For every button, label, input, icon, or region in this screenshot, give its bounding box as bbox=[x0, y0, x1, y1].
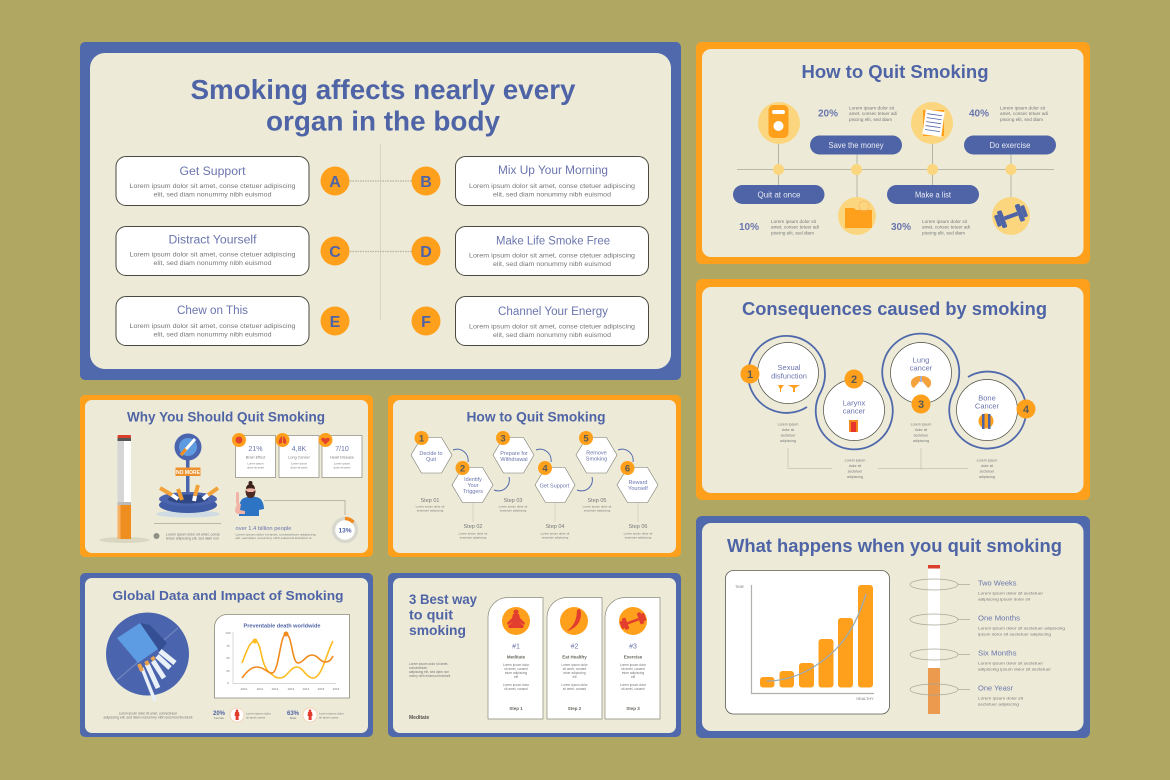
item 2: larynx cancer: Larynx bbox=[843, 398, 866, 408]
item 3: lung cancer: Lung bbox=[913, 356, 929, 364]
card: Get Support: Lorem ipsum dolor sit amet, conse ctetuer adipiscing bbox=[130, 183, 296, 190]
card: step 2 eat healthy: Lorem ipsum dolor bbox=[561, 663, 589, 667]
icon: document bbox=[911, 102, 953, 144]
item 4: bone cancer: Cancer bbox=[975, 402, 1000, 410]
stat: 40%: Lorem ipsum dolor sit bbox=[1000, 106, 1046, 110]
chart: 13% donut: 13% bbox=[338, 528, 352, 534]
title: How to Quit Smoking bbox=[802, 62, 988, 82]
title: to quit bbox=[409, 606, 453, 622]
card: step 2 eat healthy: Step 2 bbox=[568, 706, 582, 711]
stat: lung cancer: Lung Cancer bbox=[288, 456, 311, 460]
step 5 bbox=[576, 431, 617, 512]
badge: B bbox=[412, 166, 440, 196]
step 2: Identify bbox=[464, 477, 482, 483]
step 2 bbox=[452, 461, 493, 540]
item 3: lung cancer: adipiscing bbox=[913, 439, 929, 443]
milestone: two weeks: Lorem ipsum dolor sit sectetuer bbox=[978, 592, 1044, 596]
stat: 20%: Lorem ipsum dolor sit bbox=[849, 106, 895, 110]
pill: Save the money bbox=[810, 136, 902, 154]
stat: heart disease: 7/10 bbox=[335, 446, 349, 453]
milestone: one year bbox=[910, 684, 1024, 706]
panel: what happens when you quit bbox=[696, 516, 1090, 738]
card: Chew on This: Lorem ipsum dolor sit amet, conse ctetuer adipiscing bbox=[130, 323, 296, 330]
item 4: bone cancer: 4 bbox=[1023, 404, 1030, 416]
text: 1.4 billion people: elit, sed diam nonummy nibh euismod tincidunt ut bbox=[236, 536, 312, 540]
card: Distract Yourself bbox=[116, 226, 309, 276]
illustration: man smoking bbox=[235, 481, 264, 516]
badge: A bbox=[320, 166, 350, 196]
stat: lung cancer bbox=[276, 433, 319, 478]
pill: Save the money: Save the money bbox=[828, 141, 884, 150]
card: Make Life Smoke Free: Make Life Smoke Free bbox=[496, 236, 610, 248]
stat: 10%: 10% bbox=[739, 222, 759, 233]
milestone: six months: adipiscing ipsum dolor sit sectetuer bbox=[978, 668, 1052, 672]
panel: 3 best ways bbox=[388, 573, 681, 737]
title: How to Quit Smoking bbox=[466, 410, 606, 424]
card: Channel Your Energy: Channel Your Energy bbox=[498, 306, 608, 318]
stat: 20% female: 20% bbox=[213, 711, 226, 717]
card: Distract Yourself: Distract Yourself bbox=[168, 234, 257, 246]
step 6: Step 06 bbox=[629, 524, 647, 530]
pill: Do exercise bbox=[964, 136, 1056, 154]
stat: 30%: 30% bbox=[891, 222, 911, 233]
pill: Do exercise: Do exercise bbox=[990, 141, 1031, 150]
text: 1.4 billion people bbox=[236, 526, 316, 540]
stat: 20% bbox=[818, 106, 897, 122]
milestone: one year: One Yeasr bbox=[978, 684, 1013, 692]
item 2: larynx cancer: dolor sit bbox=[849, 464, 861, 468]
item 3: lung cancer: sectetuer bbox=[914, 434, 929, 438]
pill: Quit at once bbox=[733, 185, 824, 204]
step 5: Smoking bbox=[586, 456, 607, 462]
card: Mix Up Your Morning: elit, sed diam nonummy nibh euismod bbox=[493, 192, 611, 198]
milestone: six months: Six Months bbox=[978, 648, 1017, 658]
pill: Make a list: Make a list bbox=[915, 190, 952, 200]
stat: 63% male: Male bbox=[290, 716, 297, 720]
chart: preventable death line chart: 2012 bbox=[272, 687, 279, 691]
card: step 3 exercise bbox=[605, 598, 660, 719]
text: 1.4 billion people: Lorem ipsum dolor sit amet, consectetuer adipiscing bbox=[236, 532, 316, 536]
card: step 1 meditate: Lorem ipsum dolor bbox=[503, 683, 530, 687]
panel: how to quit steps bbox=[388, 395, 681, 557]
title: organ in the body bbox=[266, 106, 500, 136]
stat: brain effect: 21% bbox=[248, 446, 263, 453]
card: Distract Yourself: Lorem ipsum dolor sit amet, conse ctetuer adipiscing bbox=[130, 252, 296, 258]
item 1: sexual disfunction: 1 bbox=[747, 369, 753, 381]
step 6: Yourself bbox=[628, 486, 648, 492]
card: step 3 exercise: elit bbox=[631, 675, 635, 679]
stat: 10%: amet, consec tetuer adi bbox=[771, 224, 819, 230]
card: step 1 meditate: #1 bbox=[512, 644, 520, 650]
icon: folder wallet bbox=[838, 197, 876, 235]
chart: preventable death line chart bbox=[214, 614, 350, 698]
stat: lung cancer: 4,8K bbox=[292, 446, 307, 453]
panel: smoking affects every organ bbox=[80, 42, 681, 380]
card: step 3 exercise: #3 bbox=[629, 644, 637, 650]
stat: 63% male: 63% bbox=[287, 711, 300, 717]
illustration: cigarette timeline bbox=[928, 565, 940, 714]
milestone: one months: One Months bbox=[978, 614, 1020, 622]
item 4: bone cancer: Bone bbox=[978, 394, 996, 402]
step 2: 2 bbox=[460, 464, 465, 474]
item 3: lung cancer: Lorem ipsum bbox=[911, 422, 931, 426]
card: step 2 eat healthy: sit amet, conaed bbox=[563, 667, 586, 671]
card: step 3 exercise: Lorem ipsum dolor bbox=[620, 663, 647, 667]
stat: heart disease: Lorem ipsum bbox=[334, 462, 351, 466]
title: What happens when you quit smoking bbox=[727, 535, 1062, 556]
chart: preventable death line chart: 100 bbox=[225, 631, 231, 635]
panel: why you should quit bbox=[80, 395, 373, 557]
item 3: lung cancer: 3 bbox=[918, 399, 924, 411]
item 1: sexual disfunction: disfunction bbox=[771, 372, 807, 380]
card: Chew on This: elit, sed diam nonummy nibh euismod bbox=[154, 332, 272, 338]
badge: F: F bbox=[421, 314, 431, 331]
stat: heart disease: dolor sit amet bbox=[334, 466, 351, 470]
step 6: Lorem ipsum dolor sit bbox=[624, 532, 652, 536]
step 3: 3 bbox=[500, 434, 506, 444]
step 2: Lorem ipsum dolor sit bbox=[459, 532, 488, 536]
stat: lung cancer: dolor sit amet bbox=[291, 466, 308, 470]
icon: no more sign and ashtray bbox=[156, 434, 220, 518]
badge: F bbox=[412, 306, 440, 336]
card: step 2 eat healthy: Eat Healthy bbox=[562, 654, 587, 660]
stat: 10% bbox=[739, 219, 819, 236]
stat: 30%: amet, consec tetuer adi bbox=[922, 224, 970, 230]
step 1: 1 bbox=[419, 434, 425, 444]
title: smoking bbox=[409, 622, 466, 638]
card: step 3 exercise: sit amet, conaed bbox=[621, 687, 645, 691]
title: Why You Should Quit Smoking bbox=[127, 410, 325, 424]
item 2: larynx cancer: Lorem ipsum bbox=[845, 458, 865, 462]
text: intro: Lorem ipsum dolor sit amet, bbox=[409, 662, 448, 666]
pill: Quit at once: Quit at once bbox=[758, 190, 801, 200]
item 1: sexual disfunction: Lorem ipsum bbox=[778, 422, 798, 426]
item 4: bone cancer: Lorem ipsum bbox=[977, 458, 997, 462]
chart: preventable death line chart: 2011 bbox=[257, 687, 264, 691]
step 4 bbox=[535, 461, 575, 540]
step 3: Step 03 bbox=[504, 498, 522, 504]
card: step 1 meditate: sit amet, conaed bbox=[504, 687, 528, 691]
step 1 bbox=[411, 431, 452, 512]
card: Make Life Smoke Free: elit, sed diam nonummy nibh euismod bbox=[493, 261, 611, 268]
badge: D bbox=[412, 236, 440, 266]
item 2: larynx cancer: 2 bbox=[851, 374, 857, 386]
text: description: adipiscing elit, sed diam nonummy nibh euismod tincidunt bbox=[104, 716, 193, 720]
chart: preventable death line chart: 2014 bbox=[303, 687, 310, 691]
item 1: sexual disfunction: dolor sit bbox=[782, 428, 794, 432]
item 1: sexual disfunction bbox=[740, 342, 818, 443]
stat: brain effect: Brain Effect bbox=[246, 456, 266, 460]
card: step 2 eat healthy: elit bbox=[572, 675, 577, 679]
step 3: Withdrawal bbox=[500, 457, 528, 463]
stat: 30%: piscing elit, sed diam bbox=[922, 230, 965, 236]
card: Make Life Smoke Free bbox=[456, 226, 648, 276]
chart: preventable death line chart: 75 bbox=[226, 644, 230, 648]
step 4: sectetuer adipiscing bbox=[542, 536, 569, 540]
stat: 63% male: sit amet conse bbox=[319, 716, 339, 720]
chart: preventable death line chart: 0 bbox=[227, 681, 229, 685]
text: 1.4 billion people: over 1.4 billion people bbox=[236, 526, 292, 532]
text: intro: adipiscing elit, sed diam non bbox=[409, 670, 449, 674]
item 4: bone cancer: sectetuer bbox=[980, 470, 995, 474]
icon: piggy jar bbox=[758, 102, 800, 144]
step 6: 6 bbox=[625, 464, 630, 474]
item 4: bone cancer bbox=[956, 380, 1036, 479]
badge: B: B bbox=[420, 174, 432, 191]
title: Consequences caused by smoking bbox=[742, 298, 1047, 319]
step 4: Lorem ipsum dolor sit bbox=[541, 532, 570, 536]
item 1: sexual disfunction: adipiscing bbox=[780, 439, 796, 443]
stat: 40% bbox=[969, 106, 1048, 122]
card: Chew on This bbox=[116, 296, 309, 346]
card: Get Support: Get Support bbox=[180, 166, 246, 178]
text: intro: consectetuer bbox=[409, 666, 428, 670]
step 5: sectetuer adipiscing bbox=[584, 508, 611, 512]
milestone: one months bbox=[910, 614, 1065, 636]
stat: heart disease: Heart Disease bbox=[330, 456, 354, 460]
stat: heart disease bbox=[318, 433, 362, 478]
step 1: Step 01 bbox=[421, 498, 439, 504]
card: Mix Up Your Morning: Lorem ipsum dolor sit amet, conse ctetuer adipiscing bbox=[469, 183, 635, 190]
card: step 1 meditate: Lorem ipsum dolor bbox=[503, 663, 530, 667]
stat: 20%: amet, consec tetuer adi bbox=[849, 111, 897, 116]
card: Distract Yourself: elit, sed diam nonummy nibh euismod bbox=[154, 260, 272, 267]
card: step 3 exercise: Exercise bbox=[624, 654, 643, 660]
badge: A: A bbox=[329, 174, 341, 191]
card: step 3 exercise: sit amet, conaed bbox=[621, 667, 645, 671]
label: meditate: Meditate bbox=[409, 715, 430, 721]
chart: health over time bars: HEALTHY bbox=[856, 697, 874, 701]
milestone: one months: Lorem ipsum dolor sit sectetuer adipiscing bbox=[978, 626, 1065, 630]
step 3: Lorem ipsum dolor sit bbox=[499, 504, 528, 508]
card: Channel Your Energy bbox=[456, 296, 648, 346]
step 5: 5 bbox=[583, 434, 589, 444]
milestone: one year: sectetuer adipiscing bbox=[978, 702, 1019, 706]
step 5: Remove bbox=[586, 450, 607, 456]
step 2: Triggers bbox=[463, 489, 483, 495]
card: step 3 exercise: Step 3 bbox=[626, 706, 640, 711]
icon: cigarette bbox=[100, 435, 150, 543]
card: step 1 meditate: Step 1 bbox=[509, 706, 523, 711]
step 5: Step 05 bbox=[588, 498, 606, 504]
badge: D: D bbox=[420, 244, 432, 261]
stat: 20% female: sit amet conse bbox=[246, 716, 266, 720]
card: step 2 eat healthy bbox=[547, 598, 602, 719]
badge: E bbox=[320, 306, 350, 336]
card: Make Life Smoke Free: Lorem ipsum dolor sit amet, conse ctetuer adipiscing bbox=[469, 252, 635, 260]
stat: 20% female bbox=[213, 708, 271, 722]
panel: global data bbox=[80, 573, 373, 737]
item 2: larynx cancer: adipiscing bbox=[847, 475, 863, 479]
stat: 30%: Lorem ipsum dolor sit bbox=[922, 219, 968, 224]
chart: preventable death line chart: 2015 bbox=[318, 687, 325, 691]
caption: ashtray text: Lorem ipsum dolor sit amet, conse bbox=[166, 532, 220, 536]
step 3: Prepare for bbox=[500, 451, 528, 457]
chart: preventable death line chart: 2013 bbox=[288, 687, 295, 691]
item 1: sexual disfunction: Sexual bbox=[778, 363, 801, 372]
badge: C: C bbox=[329, 244, 341, 261]
icon: dumbbell bbox=[992, 197, 1030, 235]
pill: Make a list bbox=[887, 185, 979, 204]
stat: 20%: piscing elit, sed diam bbox=[849, 117, 892, 122]
item 4: bone cancer: dolor sit bbox=[981, 464, 993, 468]
chart: 13% donut bbox=[334, 518, 356, 542]
stat: 40%: amet, consec tetuer adi bbox=[1000, 111, 1048, 116]
card: Get Support bbox=[116, 156, 309, 206]
item 3: lung cancer: dolor sit bbox=[915, 428, 927, 432]
text: intro: ummy nibh euismod tincidunt bbox=[409, 674, 450, 678]
step 1: sectetuer adipiscing bbox=[417, 508, 444, 512]
milestone: two weeks: Two Weeks bbox=[978, 578, 1017, 588]
milestone: one year: Lorem ipsum dolor sit bbox=[978, 696, 1024, 700]
item 2: larynx cancer: sectetuer bbox=[848, 470, 863, 474]
chart: health over time bars: TIME bbox=[735, 585, 744, 589]
text: description: Lorem ipsum dolor sit amet, consectetuer bbox=[119, 712, 178, 716]
badge: C bbox=[320, 236, 350, 266]
step 5: Lorem ipsum dolor sit bbox=[583, 504, 612, 508]
stat: 63% male: Lorem ipsum dolor bbox=[319, 712, 344, 716]
stat: brain effect: dolor sit amet bbox=[247, 466, 264, 470]
card: Channel Your Energy: Lorem ipsum dolor sit amet, conse ctetuer adipiscing bbox=[469, 324, 635, 330]
card: step 3 exercise: Lorem ipsum dolor bbox=[620, 683, 647, 687]
card: Mix Up Your Morning: Mix Up Your Morning bbox=[498, 165, 608, 177]
card: step 1 meditate: Meditate bbox=[507, 654, 526, 660]
card: Get Support: elit, sed diam nonummy nibh euismod bbox=[154, 192, 272, 198]
step 1: Lorem ipsum dolor sit bbox=[416, 504, 444, 508]
step 6: sectetuer adipiscing bbox=[625, 536, 652, 540]
panel: how to quit timeline bbox=[696, 42, 1090, 264]
step 4: 4 bbox=[542, 464, 548, 474]
chart: preventable death line chart: 2010 bbox=[241, 687, 248, 691]
card: Mix Up Your Morning bbox=[456, 156, 648, 206]
caption: ashtray text: tetuer adipiscing elit, sed diam non bbox=[166, 536, 219, 540]
step 3 bbox=[493, 431, 534, 512]
stat: lung cancer: Lorem ipsum bbox=[291, 462, 308, 466]
stat: 20% female: Lorem ipsum dolor bbox=[246, 712, 271, 716]
step 4: Step 04 bbox=[546, 524, 564, 530]
chart: preventable death line chart: 2016 bbox=[333, 687, 340, 691]
item 4: bone cancer: adipiscing bbox=[979, 475, 995, 479]
card: step 1 meditate: elit bbox=[514, 675, 518, 679]
card: step 3 exercise: etuer adipiscing bbox=[622, 671, 644, 675]
step 1: Quit bbox=[426, 457, 437, 463]
card: Channel Your Energy: elit, sed diam nonummy nibh euismod bbox=[493, 332, 611, 339]
chart: preventable death line chart: 50 bbox=[226, 656, 230, 660]
stat: 30% bbox=[891, 219, 970, 236]
item 1: sexual disfunction: sectetuer bbox=[781, 434, 796, 438]
stat: brain effect: Lorem ipsum bbox=[247, 462, 264, 466]
stat: brain effect bbox=[232, 433, 276, 478]
card: step 1 meditate bbox=[488, 598, 543, 719]
step 3: sectetuer adipiscing bbox=[500, 508, 527, 512]
item 3: lung cancer: cancer bbox=[910, 364, 933, 372]
card: step 1 meditate: sit amet, conaed bbox=[504, 667, 528, 671]
item 2: larynx cancer: cancer bbox=[843, 406, 866, 416]
step 6 bbox=[617, 461, 658, 540]
stat: 63% male bbox=[287, 708, 344, 722]
stat: 10%: Lorem ipsum dolor sit bbox=[771, 219, 817, 224]
chart: preventable death line chart: 25 bbox=[226, 669, 230, 673]
card: step 2 eat healthy: sit amet, conaed bbox=[563, 687, 586, 691]
item 2: larynx cancer bbox=[824, 370, 884, 479]
milestone: two weeks: adipiscing ipsum dolor sit bbox=[978, 598, 1031, 602]
milestone: six months: Lorem ipsum dolor sit sectetuer bbox=[978, 662, 1044, 666]
panel: consequences bbox=[696, 279, 1090, 500]
stat: 10%: piscing elit, sed diam bbox=[771, 230, 814, 236]
step 2: Your bbox=[467, 483, 479, 489]
step 2: sectetuer adipiscing bbox=[460, 536, 487, 540]
icon: no more sign and ashtray: NO MORE bbox=[176, 470, 201, 476]
step 1: Decide to bbox=[419, 451, 443, 457]
icon: cigarette pack no-smoking bbox=[106, 612, 189, 701]
caption: ashtray text bbox=[154, 532, 220, 540]
title: Global Data and Impact of Smoking bbox=[112, 588, 344, 603]
chart: health over time bars bbox=[726, 570, 890, 714]
card: step 2 eat healthy: #2 bbox=[571, 644, 578, 650]
title: 3 Best way bbox=[409, 591, 477, 607]
card: Chew on This: Chew on This bbox=[177, 305, 248, 317]
card: step 2 eat healthy: etuer adipiscing bbox=[563, 671, 586, 675]
badge: E: E bbox=[330, 314, 341, 331]
card: step 2 eat healthy: Lorem ipsum dolor bbox=[561, 683, 589, 687]
item 3: lung cancer bbox=[890, 342, 952, 443]
title: Smoking affects nearly every bbox=[190, 74, 576, 105]
chart: preventable death line chart: Preventable death worldwide bbox=[244, 624, 320, 630]
stat: 40%: 40% bbox=[969, 108, 989, 120]
s-curve connector bbox=[748, 334, 1026, 449]
step 4: Get Support bbox=[540, 484, 570, 490]
stat: 20%: 20% bbox=[818, 108, 838, 120]
step 2: Step 02 bbox=[464, 524, 482, 530]
step 6: Reward bbox=[629, 480, 647, 486]
card: step 1 meditate: etuer adipiscing bbox=[505, 671, 527, 675]
stat: 40%: piscing elit, sed diam bbox=[1000, 117, 1043, 122]
milestone: one months: ipsum dolor sit sectetuer adipiscing bbox=[978, 632, 1051, 636]
milestone: six months bbox=[910, 648, 1052, 672]
stat: 20% female: Female bbox=[214, 716, 224, 720]
milestone: two weeks bbox=[910, 578, 1044, 602]
